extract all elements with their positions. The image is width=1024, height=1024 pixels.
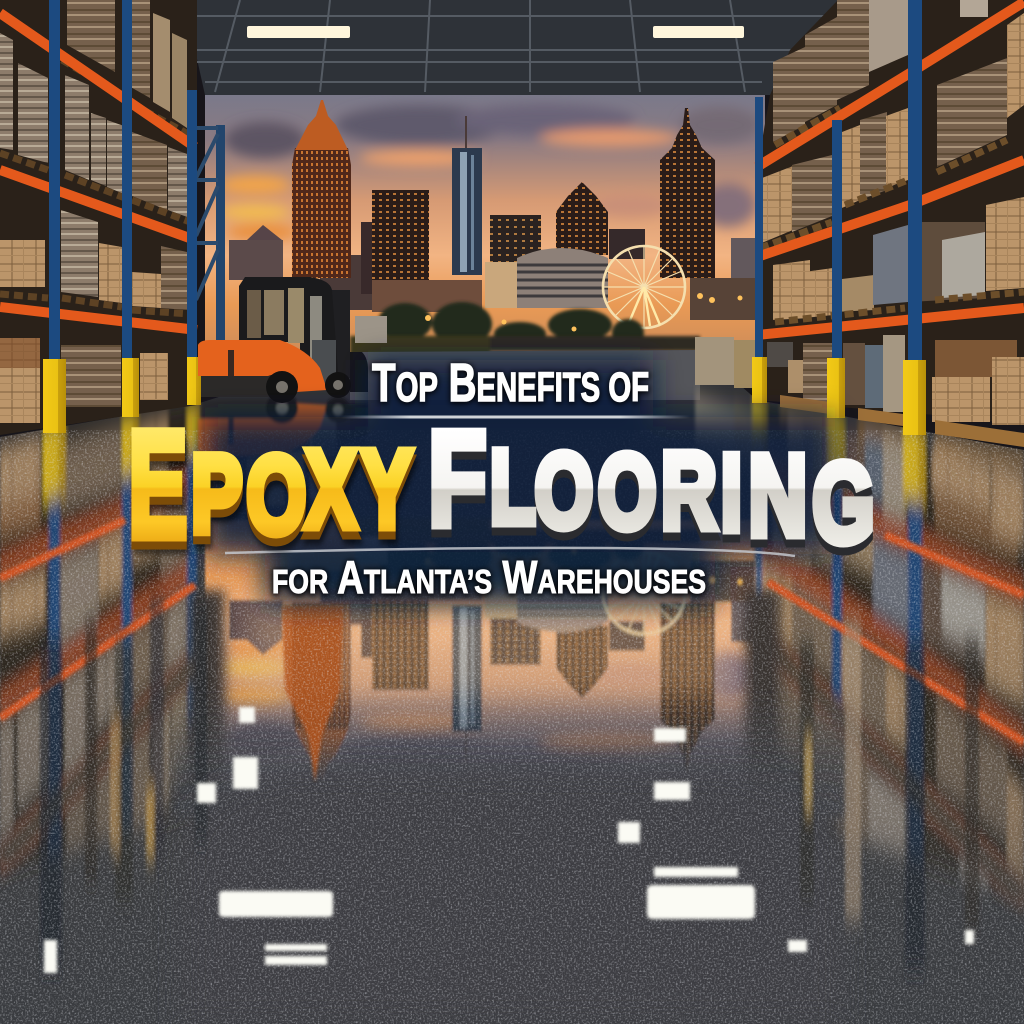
word: epoxy: P: [193, 447, 245, 569]
reflection: left rack: [0, 373, 201, 874]
light right: [653, 26, 744, 38]
word: flooring: N: [748, 440, 807, 568]
blue uprights: [49, 0, 197, 362]
line: top benefits of: TOP BENEFITS OF: [372, 354, 649, 414]
cab side panel: [312, 340, 336, 384]
tower: center midrise: [490, 215, 541, 265]
right rack: [695, 0, 1024, 447]
cab: [239, 277, 338, 372]
tower: slim blue glass: [452, 116, 482, 275]
word: epoxy: Y: [361, 437, 413, 559]
loads: upper tier: [0, 0, 187, 163]
line: top benefits of: TOP BENEFITS OF: [372, 353, 649, 413]
reflection glow: [250, 600, 730, 700]
word: flooring: F: [428, 411, 487, 562]
rear frame left: [196, 125, 225, 340]
hide far beam reflections: [0, 628, 1024, 898]
word: flooring: [428, 403, 875, 574]
tower: dark midrise: [361, 190, 429, 294]
yellow guards: [43, 357, 201, 433]
word: flooring: F: [428, 403, 487, 554]
word: epoxy: X: [305, 429, 357, 551]
word: epoxy: X: [305, 437, 357, 559]
word: flooring: O: [598, 433, 656, 551]
yellow guards: [752, 357, 926, 435]
word: flooring: L: [490, 430, 535, 546]
edge strips beside sky reflection: [190, 590, 780, 820]
trees and ground: [350, 293, 742, 362]
ceiling with trusses and lights: [150, 0, 870, 95]
floor speckle: [0, 430, 1024, 1024]
word: epoxy: O: [246, 435, 306, 557]
orange beams: [757, 2, 1024, 335]
tower: dark block: [609, 229, 645, 259]
word: flooring: R: [661, 430, 717, 552]
line: for atlanta's warehouses: FOR ATLANTA’S WAREHOUSES: [272, 552, 706, 604]
word: epoxy: X: [307, 442, 359, 564]
word: flooring: N: [748, 432, 807, 560]
pallets: [0, 60, 190, 314]
loads: upper tier: [773, 0, 1024, 142]
pallets: [760, 108, 1024, 322]
loads: floor tier: [0, 338, 168, 423]
sky at sunset: [205, 85, 765, 360]
orange beams: [0, 13, 197, 330]
parked car: [350, 352, 368, 392]
word: epoxy: Y: [361, 429, 413, 551]
word: flooring: I: [721, 440, 742, 562]
word: flooring: O: [598, 441, 656, 559]
loads: middle tier: [65, 75, 190, 218]
low civic buildings: [372, 248, 755, 320]
word: epoxy: E: [130, 411, 190, 582]
dark rack interior: [0, 0, 197, 435]
floor: [0, 333, 1024, 1024]
forklift: [198, 277, 368, 403]
vivid reflected orange beams: [0, 520, 1024, 742]
reflection: skyline: [205, 518, 765, 795]
word: flooring: O: [535, 440, 593, 558]
word: epoxy: O: [248, 448, 308, 570]
building: mid background: [320, 255, 375, 310]
title block: [128, 353, 875, 604]
word: flooring: O: [535, 432, 593, 550]
light left: [247, 26, 350, 38]
loads: lower tier: [0, 210, 187, 310]
loads: middle tier: [757, 58, 1007, 245]
building: east low: [731, 238, 755, 283]
word: flooring: L: [490, 438, 535, 554]
floor highlights: [44, 707, 974, 973]
tower: domed: [556, 182, 608, 255]
tower: crown right: [660, 108, 715, 278]
word: epoxy: E: [128, 406, 188, 577]
blue uprights: [755, 0, 922, 360]
word: flooring: G: [812, 439, 875, 566]
mast: [332, 290, 350, 378]
word: epoxy: P: [191, 442, 242, 564]
building: west twin: [229, 225, 283, 280]
tower: gabled orange crown: [292, 100, 351, 278]
title backdrop: [205, 360, 835, 604]
vertical reflection streaks: [40, 600, 979, 970]
reflection: forklift: [197, 397, 368, 470]
body: [198, 340, 327, 392]
word: epoxy: O: [246, 443, 306, 565]
wheels: [266, 371, 298, 403]
word: flooring: I: [721, 432, 742, 554]
city scene: sky and skyline: [205, 85, 765, 362]
line: for atlanta's warehouses: FOR ATLANTA’S WAREHOUSES: [272, 551, 706, 603]
word: epoxy: Y: [363, 442, 415, 564]
ferris wheel: [603, 246, 685, 328]
word: epoxy: [128, 398, 415, 582]
reflection: right rack: [695, 333, 1024, 900]
loads: lower tier: [773, 197, 1024, 320]
dark rack interior: [757, 0, 1024, 425]
fade to the dark lower floor: [0, 653, 1024, 912]
word: epoxy: E: [128, 398, 188, 569]
word: flooring: R: [661, 438, 717, 560]
left rack: [0, 0, 201, 435]
reflected orange tower: [282, 605, 343, 782]
word: flooring: G: [812, 447, 875, 574]
title rules: [225, 416, 795, 556]
loads: floor tier: [695, 335, 1024, 425]
word: epoxy: P: [191, 434, 242, 556]
